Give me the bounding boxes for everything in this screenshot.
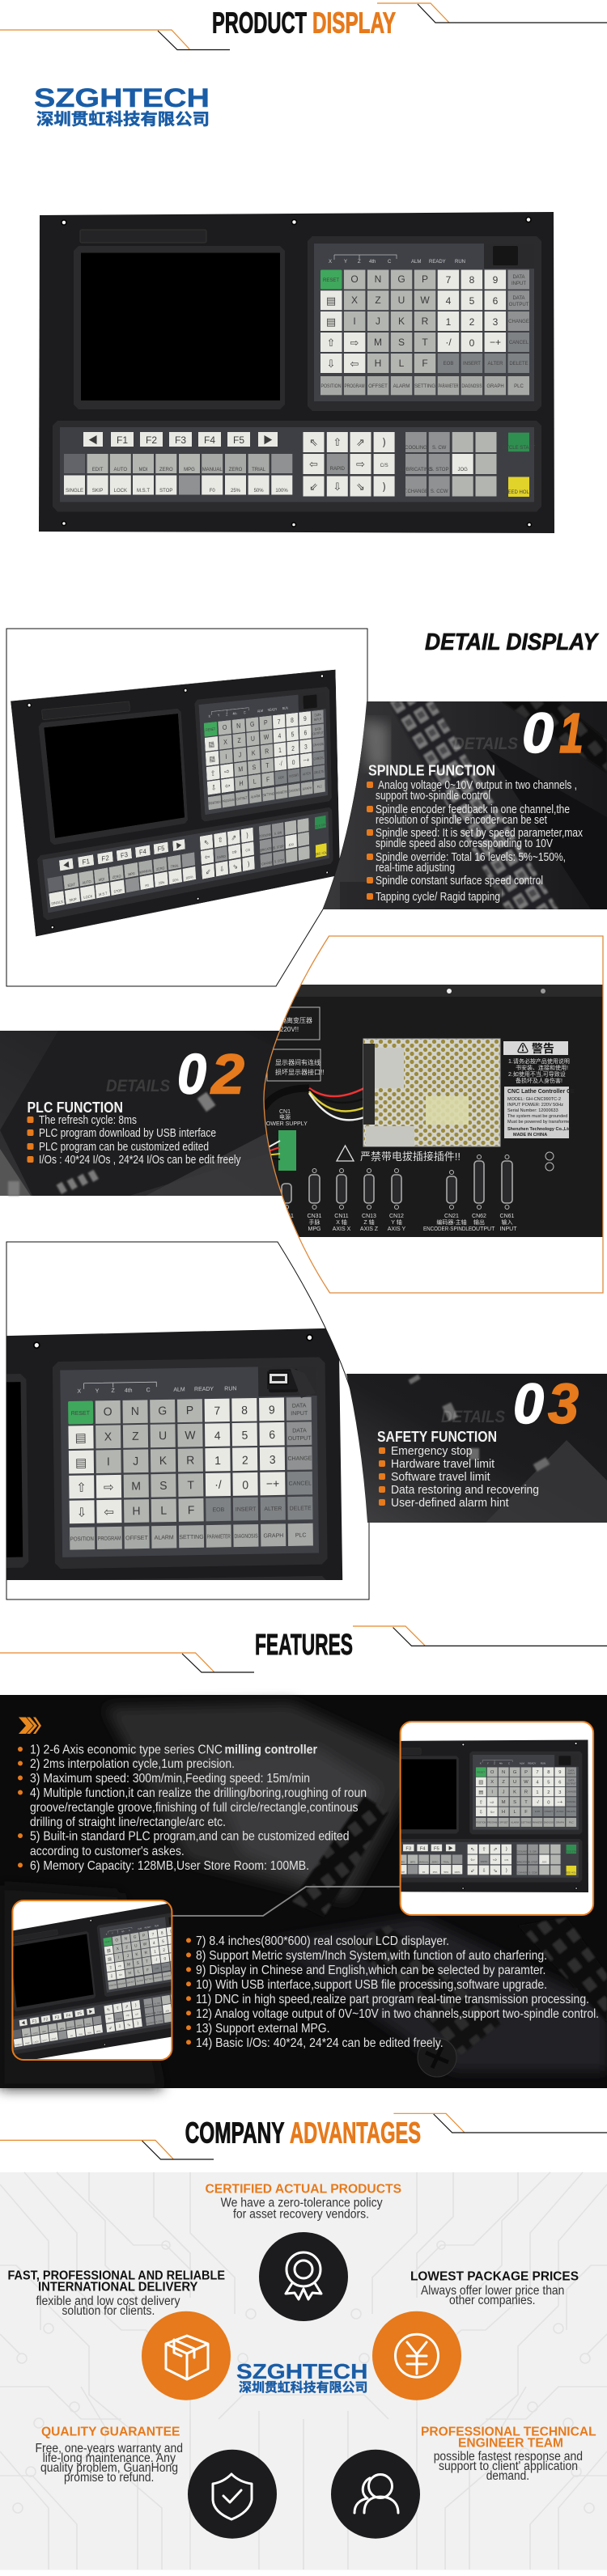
d-sub connectors xyxy=(282,1161,512,1203)
CNC control panel: G xyxy=(397,273,405,285)
cable xyxy=(264,1088,309,1108)
heading: company advantages: ADVANTAGES xyxy=(290,2116,421,2149)
number 02 xyxy=(177,1042,244,1105)
logo: center: SZGHTECH xyxy=(236,2359,367,2383)
CNC control panel: PARAMETER xyxy=(439,384,459,389)
CNC control panel: C xyxy=(388,260,392,265)
CNC control panel: ◀ xyxy=(88,434,98,446)
safety list: Hardware travel limit xyxy=(391,1458,495,1471)
CNC control panel: 1 xyxy=(446,316,452,328)
panel: features band xyxy=(0,1695,607,2088)
plc list: PLC program download by USB interface xyxy=(39,1127,216,1140)
thumbnail: left panel xyxy=(11,1900,173,2061)
detail photo: angled panel xyxy=(11,670,340,937)
CNC control panel: F4 xyxy=(204,434,215,446)
CNC control panel: DATA xyxy=(512,275,525,280)
CNC control panel: LOCK xyxy=(114,489,127,494)
CNC control panel: INPUT xyxy=(511,282,526,286)
number 03: 3 xyxy=(548,1372,579,1435)
CNC control panel: ⇨ xyxy=(356,459,365,471)
rear panel photo: 隔离变压器 xyxy=(280,1016,312,1024)
CNC control panel: ALARM xyxy=(393,384,410,389)
CNC control panel: TRIAL xyxy=(252,468,266,472)
CNC control panel: 9 xyxy=(493,274,499,286)
CNC control panel: CHANGE xyxy=(508,320,529,324)
safety list xyxy=(379,1445,539,1510)
logo: center: 深圳贯虹科技有限公司 xyxy=(239,2379,367,2395)
CNC control panel: L xyxy=(399,358,405,369)
rating label xyxy=(504,1087,569,1138)
CNC control panel: S. CCW xyxy=(431,489,448,494)
CNC control panel: P xyxy=(422,273,428,285)
connector labels: CN31 xyxy=(308,1214,322,1219)
number 01: 1 xyxy=(559,701,584,765)
CNC control panel: 2 xyxy=(469,316,475,328)
spindle list xyxy=(367,779,584,904)
text: quality: life-long maintenance. Any xyxy=(43,2451,176,2465)
rear panel photo: 220V!! xyxy=(280,1026,299,1033)
safety heading: SAFETY FUNCTION xyxy=(377,1429,497,1445)
text: quality: QUALITY GUARANTEE xyxy=(41,2426,180,2438)
CNC control panel: AUTO xyxy=(114,468,127,472)
CNC control panel: Z xyxy=(375,294,381,306)
circle: certified xyxy=(259,2232,348,2321)
CNC control panel: ⇖ xyxy=(309,437,318,449)
rear panel photo: The system must be grounded xyxy=(507,1114,567,1119)
connector labels: 手脉 xyxy=(309,1218,320,1226)
CNC control panel: ) xyxy=(382,481,386,494)
text: certified xyxy=(206,2183,401,2222)
CNC control panel: JOG xyxy=(458,468,468,472)
rear panel photo: 书安装、连接和使用! xyxy=(516,1064,568,1071)
CNC control panel: 4th xyxy=(369,260,376,265)
CNC control panel: W xyxy=(420,294,430,306)
heading: features xyxy=(0,1626,607,1672)
CNC control panel: −+ xyxy=(490,337,501,348)
CNC control panel: ⇧ xyxy=(333,437,342,449)
CNC control panel: ▶ xyxy=(263,434,273,446)
text: quality: Free, one-years warranty and xyxy=(36,2442,183,2455)
CNC control panel: T xyxy=(422,337,428,348)
rear panel photo xyxy=(259,936,603,1293)
CNC control panel: ⇙ xyxy=(309,481,318,494)
text: prices: Always offer lower price than xyxy=(421,2284,564,2298)
CNC control panel: DATA xyxy=(512,296,525,301)
logo: SZGHTECH: SZGHTECH xyxy=(34,83,210,112)
text: delivery: solution for clients. xyxy=(62,2304,155,2318)
connector labels: OUTPUT xyxy=(472,1227,495,1232)
CNC control panel: MDI xyxy=(139,468,148,472)
rear panel photo: CNC Lathe Controller CE xyxy=(507,1089,575,1095)
CNC control panel: R xyxy=(422,316,429,327)
CNC control panel: RAPID xyxy=(330,467,346,472)
power connector xyxy=(262,1109,308,1171)
spindle list: spindle speed also coressponding to 10V xyxy=(376,837,553,850)
CNC control panel: DIAGNOSIS xyxy=(461,384,482,389)
CNC control panel: 50% xyxy=(254,489,264,494)
text: engineers xyxy=(421,2426,596,2483)
text: delivery xyxy=(8,2269,225,2318)
power connector: CN1 xyxy=(279,1109,291,1115)
CNC control panel: ⇗ xyxy=(356,437,365,449)
CNC control panel: PROGRAM xyxy=(345,384,364,389)
safety list: Software travel limit xyxy=(391,1471,490,1484)
strip: 03 safety function xyxy=(340,1372,607,1523)
panel: company advantages xyxy=(0,2172,607,2570)
CNC control panel: F1 xyxy=(117,434,128,446)
CNC control panel: X xyxy=(351,294,358,306)
features list A: milling controller xyxy=(225,1743,317,1757)
strip: 03 safety function: DETAILS xyxy=(441,1408,505,1426)
power supply xyxy=(363,1039,500,1146)
CNC control panel: F5 xyxy=(233,434,244,446)
connector labels: CN51 xyxy=(279,1214,294,1219)
connector labels: CN13 xyxy=(362,1214,376,1219)
power connector: POWER SUPPLY xyxy=(262,1121,308,1127)
CNC control panel: ⇨ xyxy=(350,337,359,350)
CNC control panel: ·/ xyxy=(445,337,452,348)
connector labels: CN12 xyxy=(389,1214,404,1219)
connector labels: Y 轴 xyxy=(391,1218,402,1226)
CNC control panel: J xyxy=(376,316,380,327)
screw xyxy=(418,2038,456,2077)
safety list: User-defined alarm hint xyxy=(391,1497,508,1510)
CNC control panel: X xyxy=(329,260,332,265)
CNC control panel: F3 xyxy=(175,434,186,446)
text: quality: quality problem, GuanHong xyxy=(40,2461,178,2475)
strip: 01 spindle function: DETAILS xyxy=(453,735,518,753)
heading: company advantages xyxy=(0,2113,607,2159)
rear panel photo: Serial Number: 12000633 xyxy=(507,1108,558,1113)
CNC control panel: M xyxy=(374,337,382,348)
icon: chevrons xyxy=(19,1717,41,1734)
CNC control panel: T.CHANGE xyxy=(404,489,428,494)
text: prices: LOWEST PACKAGE PRICES xyxy=(410,2270,579,2283)
strip: 02 plc function xyxy=(0,1031,283,1196)
text: engineers: ENGINEER TEAM xyxy=(458,2437,563,2450)
number 03 xyxy=(513,1372,579,1435)
frame: detail photo 3 xyxy=(6,1242,369,1599)
CNC control panel: ▤ xyxy=(326,295,336,307)
CNC control panel: F xyxy=(422,358,428,369)
CNC control panel: RESET xyxy=(323,278,339,283)
connector labels: CN62 xyxy=(472,1214,486,1219)
features list B: 8) Support Metric system/Inch System,with function of auto charfering. xyxy=(196,1949,547,1963)
CNC control panel: ⇦ xyxy=(309,459,318,471)
connector line xyxy=(172,1887,400,1916)
features list A xyxy=(18,1743,367,1873)
CNC control panel: 3 xyxy=(493,316,499,328)
frame: detail photo 1 xyxy=(6,629,367,986)
CNC control panel: N xyxy=(375,273,381,285)
rear panel photo: MODEL: GH-CNC990TC-2 xyxy=(507,1097,561,1102)
plc list xyxy=(28,1114,241,1167)
features list B: 10) With USB interface,support USB file processing,software upgrade. xyxy=(196,1978,547,1992)
CNC control panel: Z xyxy=(358,260,361,265)
CNC control panel: F2 xyxy=(146,434,157,446)
CNC control panel: ALM xyxy=(411,260,421,265)
rear panel photo: 1.请务必按产品使用说明 xyxy=(508,1057,570,1065)
text: delivery: FAST, PROFESSIONAL AND RELIABLE xyxy=(8,2269,225,2283)
rear panel photo: 显示器间有连线 xyxy=(275,1058,320,1066)
spindle list: resolution of spindle encoder can be set xyxy=(376,814,547,827)
icon: shield xyxy=(213,2474,252,2519)
power connector: 电源 xyxy=(279,1113,291,1121)
CNC control panel: INSERT xyxy=(463,362,481,366)
rear panel photo: INPUT POWER: 220V 50Hz xyxy=(507,1103,563,1108)
circle: price xyxy=(372,2311,461,2400)
text: engineers: demand. xyxy=(486,2469,529,2483)
text: certified: CERTIFIED ACTUAL PRODUCTS xyxy=(206,2183,401,2196)
CNC control panel: ▤ xyxy=(326,316,336,328)
features list A: 2) 2ms interpolation cycle,1um precision. xyxy=(30,1757,235,1771)
CNC control panel: 7 xyxy=(446,274,452,286)
features list B: 13) Support external MPG. xyxy=(196,2022,330,2036)
CNC control panel: STOP xyxy=(159,489,172,494)
connector labels: ENCODER·SPINDLE xyxy=(423,1227,472,1232)
plc list: The refresh cycle: 8ms xyxy=(39,1114,137,1127)
CNC control panel: ⇧ xyxy=(327,337,335,350)
rear panel photo: Shenzhen Technology Co.,Ltd xyxy=(507,1127,571,1132)
features list A: 3) Maximum speed: 300m/min,Feeding speed: 15m/min xyxy=(30,1772,310,1786)
CNC control panel: U xyxy=(398,294,405,306)
connector labels: INPUT xyxy=(500,1227,517,1232)
rear panel photo: 备损坏及人身伤害! xyxy=(516,1077,562,1084)
spindle heading: SPINDLE FUNCTION xyxy=(368,762,495,778)
plc heading: PLC FUNCTION xyxy=(28,1099,123,1116)
rear panel photo: MADE IN CHINA xyxy=(513,1133,547,1138)
features list A: according to customer's askes. xyxy=(30,1845,185,1858)
connector labels: Z 轴 xyxy=(363,1218,375,1226)
CNC control panel: ALTER xyxy=(488,362,503,366)
CNC control panel: S xyxy=(398,337,405,348)
text: prices xyxy=(410,2270,579,2307)
CNC control panel: SKIP xyxy=(92,489,103,494)
text: delivery: flexible and low cost delivery xyxy=(36,2294,180,2308)
spindle list: support two-spindle control xyxy=(376,790,490,803)
CNC control panel: GRAPH xyxy=(486,384,504,389)
CNC control panel: 0 xyxy=(469,337,475,349)
CNC control panel: ⇩ xyxy=(327,358,335,371)
connector labels: CN61 xyxy=(500,1214,515,1219)
CNC control panel: FEED HOLD xyxy=(505,490,533,495)
thumbnail: right panel xyxy=(400,1721,594,1916)
number 02: 0 xyxy=(177,1042,206,1105)
connector labels: 输出 xyxy=(473,1218,485,1226)
warning label xyxy=(503,1041,568,1055)
CNC control panel: ZERO xyxy=(159,468,173,472)
CNC control panel: MANUAL xyxy=(202,468,223,472)
circle: delivery xyxy=(142,2311,231,2400)
CNC control panel: M.S.T xyxy=(137,489,150,494)
heading: product display: DISPLAY xyxy=(312,6,396,39)
CNC control panel: S. CW xyxy=(432,446,447,451)
CNC control panel: ⇘ xyxy=(356,481,365,494)
text: certified: We have a zero-tolerance policy xyxy=(221,2196,383,2210)
text: quality xyxy=(36,2426,183,2485)
warning text: 严禁带电拔插接插件!! xyxy=(360,1150,461,1163)
text: certified: for asset recovery vendors. xyxy=(233,2207,369,2222)
CNC control panel: Y xyxy=(344,260,347,265)
number 02: 2 xyxy=(210,1042,244,1105)
CNC control panel: K xyxy=(398,316,405,327)
icon: ribbon xyxy=(286,2252,321,2299)
features list B: 14) Basic I/Os: 40*24, 24*24 can be edited freely. xyxy=(196,2036,444,2050)
CNC control panel: 8 xyxy=(469,274,475,286)
CNC control panel: OUTPUT xyxy=(509,303,529,307)
rear panel photo: Must be powered by transformer xyxy=(507,1120,571,1125)
CNC control panel: EDIT xyxy=(92,468,104,472)
CNC control panel: 6 xyxy=(493,295,499,307)
number 01: 0 xyxy=(522,701,554,765)
CNC control panel: READY xyxy=(429,260,446,265)
spindle list: real-time adjusting xyxy=(376,862,455,875)
CNC control panel: MPG xyxy=(184,468,195,472)
connector labels: AXIS Y xyxy=(388,1227,406,1232)
connector labels: X 轴 xyxy=(336,1218,347,1226)
CNC control panel: S. STOP xyxy=(430,468,448,472)
CNC control panel: O xyxy=(350,273,359,285)
CNC control panel: ZERO xyxy=(229,468,243,472)
connector labels: CN11 xyxy=(334,1214,349,1219)
icon: people xyxy=(354,2474,398,2513)
circle: team xyxy=(331,2450,420,2539)
CNC control panel: POSITION xyxy=(320,384,342,389)
CNC control panel: 25% xyxy=(231,489,241,494)
connector labels: CN21 xyxy=(444,1214,459,1219)
text: delivery: INTERNATIONAL DELIVERY xyxy=(38,2280,198,2294)
number 01 xyxy=(522,701,584,765)
heading: product display xyxy=(0,3,607,50)
connector labels: AXIS Z xyxy=(360,1227,379,1232)
rear panel photo: ⚠ 警告 xyxy=(517,1042,554,1055)
close-up keypad photo xyxy=(6,1328,343,1580)
text: prices: other companies. xyxy=(449,2294,536,2307)
CNC control panel: CYCLE START xyxy=(503,446,536,451)
features list A: 4) Multiple function,it can realize the drilling/boring,roughing of roun xyxy=(30,1786,367,1800)
heading: company advantages: COMPANY xyxy=(185,2116,285,2149)
warning boxes xyxy=(267,1007,320,1081)
logo: center xyxy=(236,2359,367,2395)
features list B xyxy=(186,1934,599,2050)
rear panel photo: 损坏显示器接口!! xyxy=(275,1068,324,1076)
CNC control panel: EOB xyxy=(444,362,453,366)
strip: 02 plc function: DETAILS xyxy=(106,1077,170,1095)
features list A: groove/rectangle groove,finishing of full circle/rectangle,continous xyxy=(30,1801,358,1815)
safety list: Data restoring and recovering xyxy=(391,1484,539,1497)
icon: box xyxy=(166,2336,208,2379)
text: engineers: support to client' application xyxy=(439,2459,578,2473)
text: engineers: PROFESSIONAL TECHNICAL xyxy=(421,2426,596,2438)
CNC control panel xyxy=(39,212,554,533)
CNC control panel: I xyxy=(353,316,356,327)
features list A: 5) Built-in standard PLC program,and can be customized edited xyxy=(30,1830,350,1843)
features list A: drilling of straight line/rectangle/arc etc. xyxy=(30,1815,226,1829)
CNC control panel: F0 xyxy=(210,489,215,494)
plc list: I/Os : 40*24 I/Os , 24*24 I/Os can be edit freely xyxy=(39,1154,241,1167)
spindle list: Spindle constant surface speed control xyxy=(376,875,543,888)
logo: SZGHTECH xyxy=(34,83,210,129)
features list A: 1) 2-6 Axis economic type series CNC xyxy=(30,1743,223,1757)
CNC control panel: OFFSET xyxy=(368,384,388,389)
CNC control panel: PLC xyxy=(514,384,524,389)
spindle list: Tapping cycle/ Ragid tapping xyxy=(376,891,500,904)
CNC control panel: DELETE xyxy=(509,362,528,366)
CNC control panel: ) xyxy=(382,437,386,449)
plc list: PLC program can be customized edited xyxy=(39,1141,209,1154)
heading: features: FEATURES xyxy=(255,1628,353,1661)
rear panel photo: 2.如使用不当,可导致设 xyxy=(508,1070,566,1078)
warning text xyxy=(337,1146,461,1163)
spindle list: Spindle encoder feedback in one channel,the xyxy=(376,803,570,816)
connector labels: 编码器·主轴 xyxy=(436,1218,467,1226)
CNC control panel: 4 xyxy=(446,295,452,307)
connector labels: MPG xyxy=(308,1227,320,1232)
CNC control panel: RUN xyxy=(455,260,465,265)
CNC control panel: SINGLE xyxy=(66,489,83,494)
CNC control panel: ⇦ xyxy=(350,358,359,371)
text: engineers: possible fastest response and xyxy=(434,2450,583,2464)
logo: SZGHTECH: 深圳贯虹科技有限公司 xyxy=(36,110,210,129)
CNC control panel: ⇩ xyxy=(333,481,342,494)
CNC control panel: 100% xyxy=(275,489,288,494)
strip: 01 spindle function xyxy=(316,701,607,909)
circle: quality xyxy=(188,2450,277,2539)
features list B: 7) 8.4 inches(800*600) real csolour LCD displayer. xyxy=(196,1934,449,1948)
icon: yen xyxy=(395,2334,439,2377)
CNC control panel: COOLING xyxy=(405,446,427,451)
spindle list: Spindle override: Total 16 levels: 5%~150%, xyxy=(376,851,566,864)
CNC control panel: SETTING xyxy=(414,384,435,389)
connector labels xyxy=(290,1214,516,1231)
heading: product display: PRODUCT xyxy=(212,6,307,39)
features list A: 6) Memory Capacity: 128MB,User Store Room: 100MB. xyxy=(30,1859,309,1873)
CNC control panel: 5 xyxy=(469,295,475,307)
connector labels: 输入 xyxy=(502,1218,513,1226)
text: quality: promise to refund. xyxy=(64,2471,154,2485)
CNC control panel: C/S xyxy=(380,464,388,468)
features list B: 9) Display in Chinese and English,which can be selected by paramter. xyxy=(196,1964,545,1977)
CNC control panel: CANCEL xyxy=(509,341,529,345)
CNC control panel: LUBRICATING xyxy=(400,468,432,472)
CNC control panel: H xyxy=(375,358,381,369)
connector labels: AXIS X xyxy=(333,1227,351,1232)
safety list: Emergency stop xyxy=(391,1445,473,1458)
number 03: 0 xyxy=(513,1372,544,1435)
